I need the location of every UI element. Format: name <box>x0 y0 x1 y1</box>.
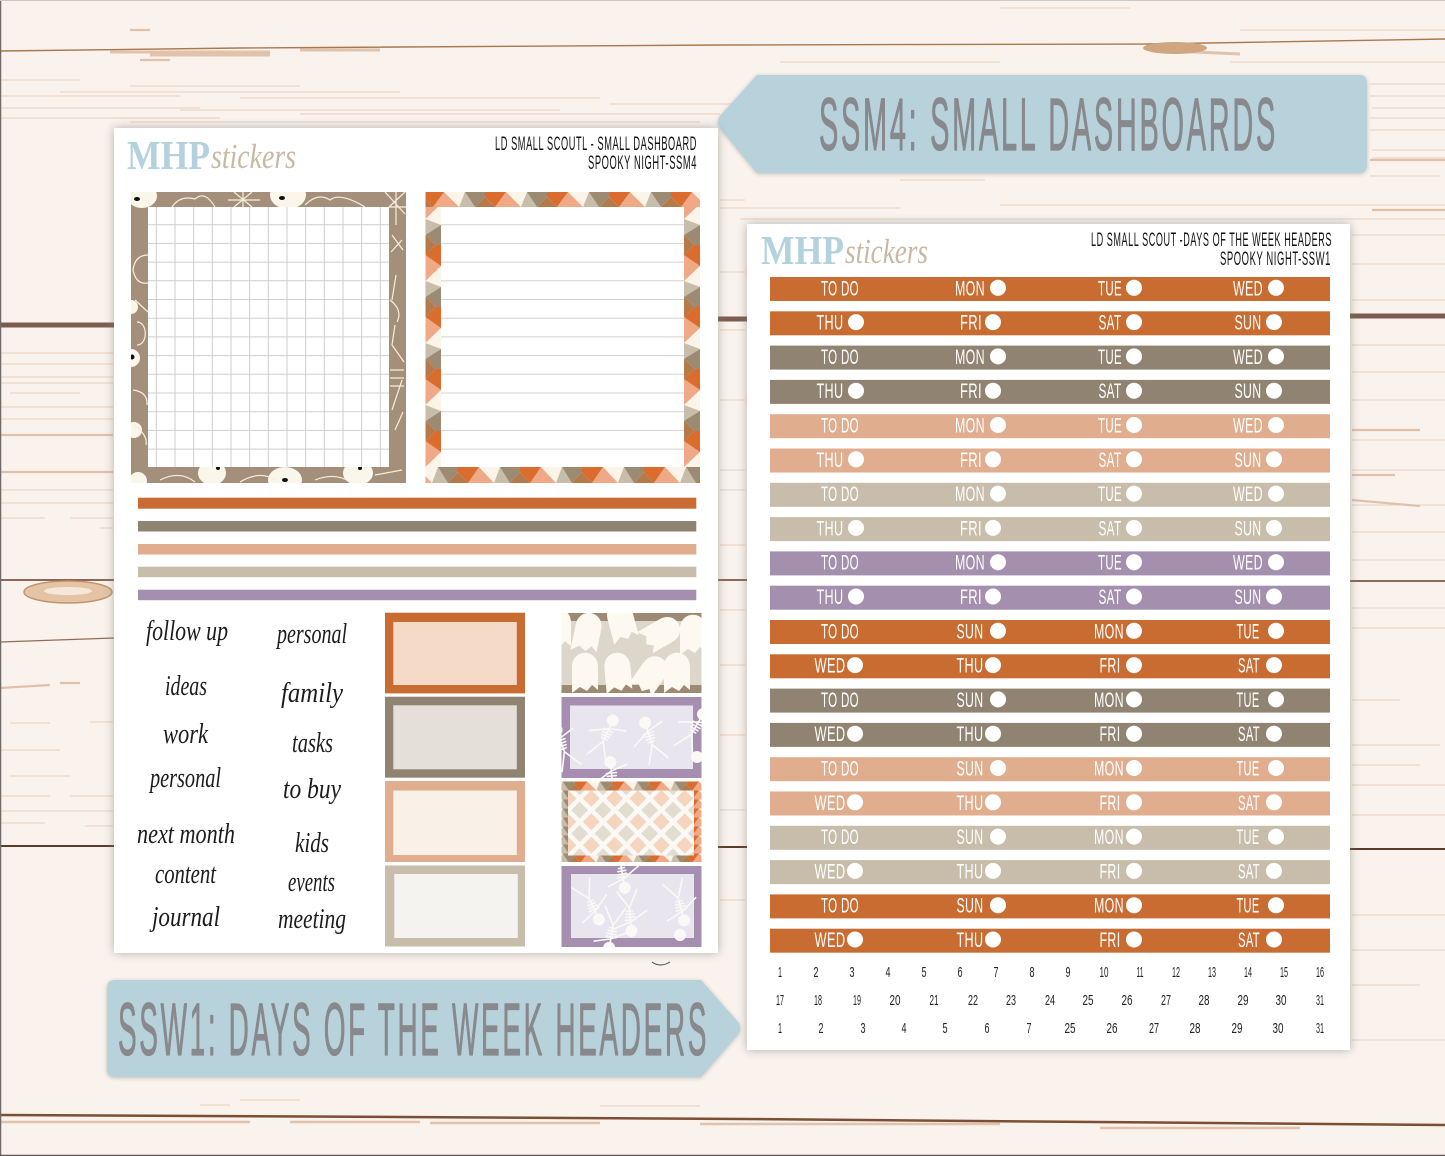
header row 10 purple: SAT <box>1098 586 1122 609</box>
date numbers row 3 <box>778 1020 1324 1037</box>
date numbers row 2: 23 <box>1006 992 1016 1009</box>
date numbers row 2: 30 <box>1276 992 1286 1009</box>
panel: SSW1 days of the week sticker sheet: 31 <box>1316 1020 1324 1037</box>
script word stickers: work <box>163 718 209 750</box>
header row 6 peach: SUN <box>1234 449 1262 472</box>
panel: SSW1 days of the week sticker sheet <box>747 224 1350 1050</box>
header row 19 orange: SUN <box>956 895 984 918</box>
script word stickers: tasks <box>292 727 333 759</box>
header row 10 purple: THU <box>816 586 844 609</box>
date numbers row 3: 30 <box>1272 1020 1284 1037</box>
cut mark under sheet <box>652 962 670 965</box>
header row 1 orange: MON <box>955 277 985 300</box>
banner: SSW1 days of the week headers <box>107 980 740 1078</box>
plaid box <box>562 782 702 862</box>
header row 17 sand: SUN <box>956 826 984 849</box>
header row 20 orange: THU <box>956 929 984 952</box>
header row 13 taupe: TUE <box>1236 689 1260 712</box>
header row 20 orange: FRI <box>1100 929 1120 952</box>
header row 13 taupe: SUN <box>956 689 984 712</box>
script word stickers: personal <box>276 618 347 650</box>
date numbers row 2: 26 <box>1122 992 1132 1009</box>
header row 9 purple <box>770 551 1330 575</box>
date numbers row 1: 2 <box>814 964 818 981</box>
date numbers row 1: 3 <box>850 964 854 981</box>
ghost pattern box <box>562 613 702 693</box>
script word stickers: follow up <box>146 615 228 647</box>
header row 19 orange: MON <box>1094 895 1124 918</box>
header row 16 peach <box>770 792 1330 816</box>
header row 17 sand: TUE <box>1236 826 1260 849</box>
header row 4 taupe: SUN <box>1234 380 1262 403</box>
date numbers row 2: 28 <box>1198 992 1210 1009</box>
header row 11 orange: SUN <box>956 620 984 643</box>
header row 15 peach: MON <box>1094 758 1124 781</box>
header row 18 sand: THU <box>956 860 984 883</box>
date numbers row 2: 27 <box>1161 992 1171 1009</box>
header row 3 taupe: MON <box>955 346 985 369</box>
panel: SSW1 days of the week sticker sheet: 31 <box>1316 992 1324 1009</box>
header row 1 orange: TUE <box>1098 277 1122 300</box>
date numbers row 1: 5 <box>922 964 926 981</box>
header row 11 orange: MON <box>1094 620 1124 643</box>
header row 18 sand: SAT <box>1238 860 1260 883</box>
script word stickers: to buy <box>283 773 341 805</box>
header row 2 orange: SUN <box>1234 312 1262 335</box>
sheet title <box>495 134 697 174</box>
script word stickers: kids <box>295 827 329 859</box>
date numbers row 1: 7 <box>994 964 998 981</box>
logo: MHP stickers: MHP <box>761 227 844 273</box>
header row 19 orange: TO DO <box>821 895 859 918</box>
date numbers row 3: 27 <box>1149 1020 1159 1037</box>
header row 8 sand: SAT <box>1098 517 1122 540</box>
sheet title <box>1091 230 1332 270</box>
script word stickers: content <box>155 858 217 890</box>
date numbers row 1 <box>778 964 1324 981</box>
header row 16 peach: THU <box>956 792 984 815</box>
logo: MHP stickers: MHP <box>127 132 210 178</box>
date numbers row 2: 21 <box>930 992 938 1009</box>
banner: SSM4 small dashboards <box>718 75 1367 174</box>
date numbers row 3: 5 <box>942 1020 948 1037</box>
header row 2 orange: SAT <box>1098 312 1122 335</box>
solid framed boxes <box>385 613 525 946</box>
panel: SSM4 small dashboard sticker sheet: SPOOKY NIGHT-SSM4 <box>588 153 697 174</box>
date numbers row 3: 28 <box>1190 1020 1200 1037</box>
header row 9 purple: TO DO <box>821 552 859 575</box>
date numbers row 3: 4 <box>902 1020 906 1037</box>
header row 5 peach: WED <box>1233 415 1263 438</box>
header row 6 peach: FRI <box>960 449 982 472</box>
date numbers row 1: 4 <box>886 964 890 981</box>
date numbers row 2: 20 <box>890 992 900 1009</box>
header row 9 purple: MON <box>955 552 985 575</box>
header row 5 peach: MON <box>955 415 985 438</box>
header row 15 peach: TO DO <box>821 758 859 781</box>
header row 17 sand <box>770 826 1330 850</box>
header row 9 purple: WED <box>1233 552 1263 575</box>
header row 14 taupe: FRI <box>1100 723 1120 746</box>
script word stickers: personal <box>149 762 221 794</box>
script word stickers: ideas <box>165 670 207 702</box>
header row 3 taupe <box>770 346 1330 370</box>
header row 6 peach: THU <box>816 449 844 472</box>
header row 12 orange <box>770 654 1330 678</box>
header row 7 sand <box>770 483 1330 507</box>
date numbers row 3: 29 <box>1232 1020 1242 1037</box>
date numbers row 2: 18 <box>814 992 822 1009</box>
header row 12 orange: THU <box>956 655 984 678</box>
header row 13 taupe: TO DO <box>821 689 859 712</box>
header row 5 peach: TO DO <box>821 415 859 438</box>
header row 8 sand <box>770 517 1330 541</box>
header row 13 taupe: MON <box>1094 689 1124 712</box>
header row 18 sand <box>770 860 1330 884</box>
header row 8 sand: THU <box>816 517 844 540</box>
header row 8 sand: FRI <box>960 517 982 540</box>
header row 10 purple <box>770 586 1330 610</box>
header row 17 sand: TO DO <box>821 826 859 849</box>
header row 16 peach: FRI <box>1100 792 1120 815</box>
header row 3 taupe: TO DO <box>821 346 859 369</box>
logo: MHP stickers: stickers <box>845 232 928 271</box>
header row 7 sand: WED <box>1233 483 1263 506</box>
date numbers row 1: 12 <box>1172 964 1180 981</box>
header row 19 orange: TUE <box>1236 895 1260 918</box>
date numbers row 2: 17 <box>776 992 784 1009</box>
header row 6 peach <box>770 448 1330 472</box>
header row 11 orange <box>770 620 1330 644</box>
header row 1 orange: TO DO <box>821 277 859 300</box>
date numbers row 1: 13 <box>1208 964 1216 981</box>
header row 4 taupe: THU <box>816 380 844 403</box>
skeleton pattern box 2 <box>562 866 702 947</box>
logo: MHP stickers: stickers <box>211 137 296 176</box>
header row 20 orange: SAT <box>1238 929 1260 952</box>
header row 7 sand: MON <box>955 483 985 506</box>
panel: SSM4 small dashboard sticker sheet: LD SMALL SCOUTL - SMALL DASHBOARD <box>495 134 697 155</box>
header row 2 orange: FRI <box>960 312 982 335</box>
header row 18 sand: FRI <box>1100 860 1120 883</box>
header row 17 sand: MON <box>1094 826 1124 849</box>
header row 15 peach: SUN <box>956 758 984 781</box>
header row 5 peach <box>770 414 1330 438</box>
header row 7 sand: TUE <box>1098 483 1122 506</box>
header row 20 orange: WED <box>814 929 846 952</box>
header row 14 taupe <box>770 723 1330 747</box>
header row 4 taupe <box>770 380 1330 404</box>
script word stickers: family <box>281 677 343 709</box>
date numbers row 2: 19 <box>853 992 861 1009</box>
script word stickers: events <box>288 866 335 898</box>
header row 9 purple: TUE <box>1098 552 1122 575</box>
date numbers row 3: 1 <box>778 1020 782 1037</box>
header row 19 orange <box>770 894 1330 918</box>
script word stickers <box>137 615 347 935</box>
script word stickers: next month <box>137 818 235 850</box>
date numbers row 3: 25 <box>1064 1020 1076 1037</box>
date numbers row 3: 2 <box>818 1020 824 1037</box>
header row 15 peach <box>770 757 1330 781</box>
header row 12 orange: WED <box>814 655 846 678</box>
date numbers row 2 <box>776 992 1324 1009</box>
date numbers row 3: 7 <box>1026 1020 1032 1037</box>
header row 6 peach: SAT <box>1098 449 1122 472</box>
header row 1 orange: WED <box>1233 277 1263 300</box>
header row 2 orange <box>770 311 1330 335</box>
panel: SSM4 small dashboard sticker sheet <box>114 128 720 965</box>
date numbers row 3: 6 <box>984 1020 990 1037</box>
header row 14 taupe: WED <box>814 723 846 746</box>
date numbers row 1: 14 <box>1244 964 1252 981</box>
script word stickers: journal <box>149 901 220 933</box>
date numbers row 1: 1 <box>778 964 782 981</box>
date numbers row 1: 11 <box>1136 964 1144 981</box>
date numbers row 1: 15 <box>1280 964 1288 981</box>
logo: MHP stickers <box>761 227 928 273</box>
header row 14 taupe: THU <box>956 723 984 746</box>
lined notes sticker with plaid border <box>426 192 700 483</box>
date numbers row 2: 22 <box>968 992 978 1009</box>
header row 1 orange <box>770 277 1330 301</box>
date numbers row 2: 25 <box>1082 992 1094 1009</box>
date numbers row 2: 24 <box>1045 992 1055 1009</box>
header row 10 purple: FRI <box>960 586 982 609</box>
date numbers row 1: 9 <box>1066 964 1070 981</box>
header row 14 taupe: SAT <box>1238 723 1260 746</box>
sheet title: SPOOKY NIGHT-SSW1 <box>1220 249 1331 270</box>
header row 16 peach: WED <box>814 792 846 815</box>
date numbers row 1: 6 <box>958 964 962 981</box>
header row 8 sand: SUN <box>1234 517 1262 540</box>
header row 4 taupe: SAT <box>1098 380 1122 403</box>
header row 3 taupe: WED <box>1233 346 1263 369</box>
header row 10 purple: SUN <box>1234 586 1262 609</box>
header row 12 orange: SAT <box>1238 655 1260 678</box>
header row 18 sand: WED <box>814 860 846 883</box>
header row 15 peach: TUE <box>1236 758 1260 781</box>
date numbers row 3: 26 <box>1106 1020 1118 1037</box>
date numbers row 1: 8 <box>1030 964 1034 981</box>
header row 7 sand: TO DO <box>821 483 859 506</box>
header row 2 orange: THU <box>816 312 844 335</box>
colour strip stickers <box>138 498 696 600</box>
header row 4 taupe: FRI <box>960 380 982 403</box>
panel: SSW1 days of the week sticker sheet: 16 <box>1316 964 1324 981</box>
header row 11 orange: TO DO <box>821 620 859 643</box>
header row 13 taupe <box>770 689 1330 713</box>
script word stickers: meeting <box>278 903 346 935</box>
skeleton pattern box 1 <box>562 697 702 778</box>
date numbers row 3: 3 <box>860 1020 866 1037</box>
header row 12 orange: FRI <box>1100 655 1120 678</box>
grid notes sticker with spooky border <box>122 181 406 493</box>
header row 11 orange: TUE <box>1236 620 1260 643</box>
header row 3 taupe: TUE <box>1098 346 1122 369</box>
header row 5 peach: TUE <box>1098 415 1122 438</box>
header row 20 orange <box>770 929 1330 953</box>
date numbers row 2: 29 <box>1238 992 1248 1009</box>
logo: MHP stickers <box>127 132 296 178</box>
date numbers row 1: 10 <box>1100 964 1108 981</box>
header row 16 peach: SAT <box>1238 792 1260 815</box>
